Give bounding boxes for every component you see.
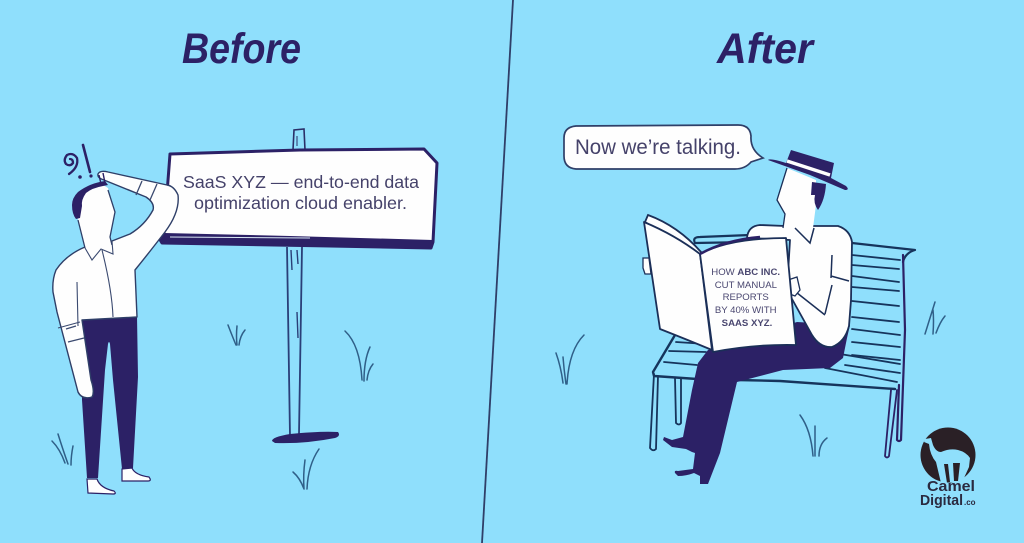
seat slats right [825, 354, 900, 382]
sign shadow [158, 233, 433, 248]
right legs [897, 255, 905, 441]
newspaper headline: CUT MANUAL [715, 280, 778, 291]
head [777, 168, 816, 228]
logo circle [920, 428, 976, 482]
right shoe [122, 468, 150, 481]
speech text: Now we’re talking. [575, 136, 741, 159]
trousers seated [663, 322, 850, 484]
logo: Camel Digital [920, 428, 979, 509]
head [78, 183, 115, 252]
signpost [158, 129, 437, 443]
camel silhouette [924, 438, 970, 483]
fingers [99, 173, 105, 184]
bench back top [694, 235, 915, 262]
cuffs [136, 181, 157, 200]
heading: After: After [716, 25, 815, 73]
bench [650, 235, 915, 458]
heading: Before: Before [182, 25, 301, 73]
shirt and arm [53, 171, 178, 398]
hat [768, 150, 848, 190]
newspaper headline: SAAS XYZ. [722, 318, 772, 329]
bench back slats right [852, 255, 900, 360]
hair [72, 181, 108, 219]
torso and arm [747, 225, 852, 347]
character: puzzled man [53, 145, 178, 494]
newspaper headline: REPORTS [723, 292, 769, 303]
left hand [643, 258, 651, 274]
character: man reading on bench [643, 150, 852, 484]
hand [785, 277, 800, 296]
newspaper left page [644, 222, 712, 350]
post top [293, 129, 305, 150]
newspaper headline: HOW ABC INC. [711, 267, 780, 278]
post base [272, 432, 339, 443]
left legs [650, 374, 681, 450]
collar and shirt details [58, 241, 113, 328]
logo text: .co [964, 498, 976, 507]
newspaper right page [700, 238, 796, 352]
speech bubble [564, 125, 763, 169]
post [287, 247, 302, 436]
collar and sleeve [795, 228, 849, 314]
question and exclamation marks [65, 154, 77, 174]
logo text: Digital [920, 492, 963, 509]
newspaper back page [645, 215, 701, 256]
grass tufts: after [556, 302, 945, 456]
sign text: SaaS XYZ — end-to-end data [183, 172, 419, 192]
hair [811, 182, 826, 210]
left shoe [87, 479, 115, 494]
newspaper headline: BY 40% WITH [715, 305, 777, 316]
bench left frame [653, 335, 697, 379]
sign text: optimization cloud enabler. [194, 193, 407, 213]
logo text: Camel [927, 478, 975, 495]
grass tufts: before [52, 325, 373, 489]
sign board [159, 149, 437, 248]
trousers [82, 316, 138, 478]
